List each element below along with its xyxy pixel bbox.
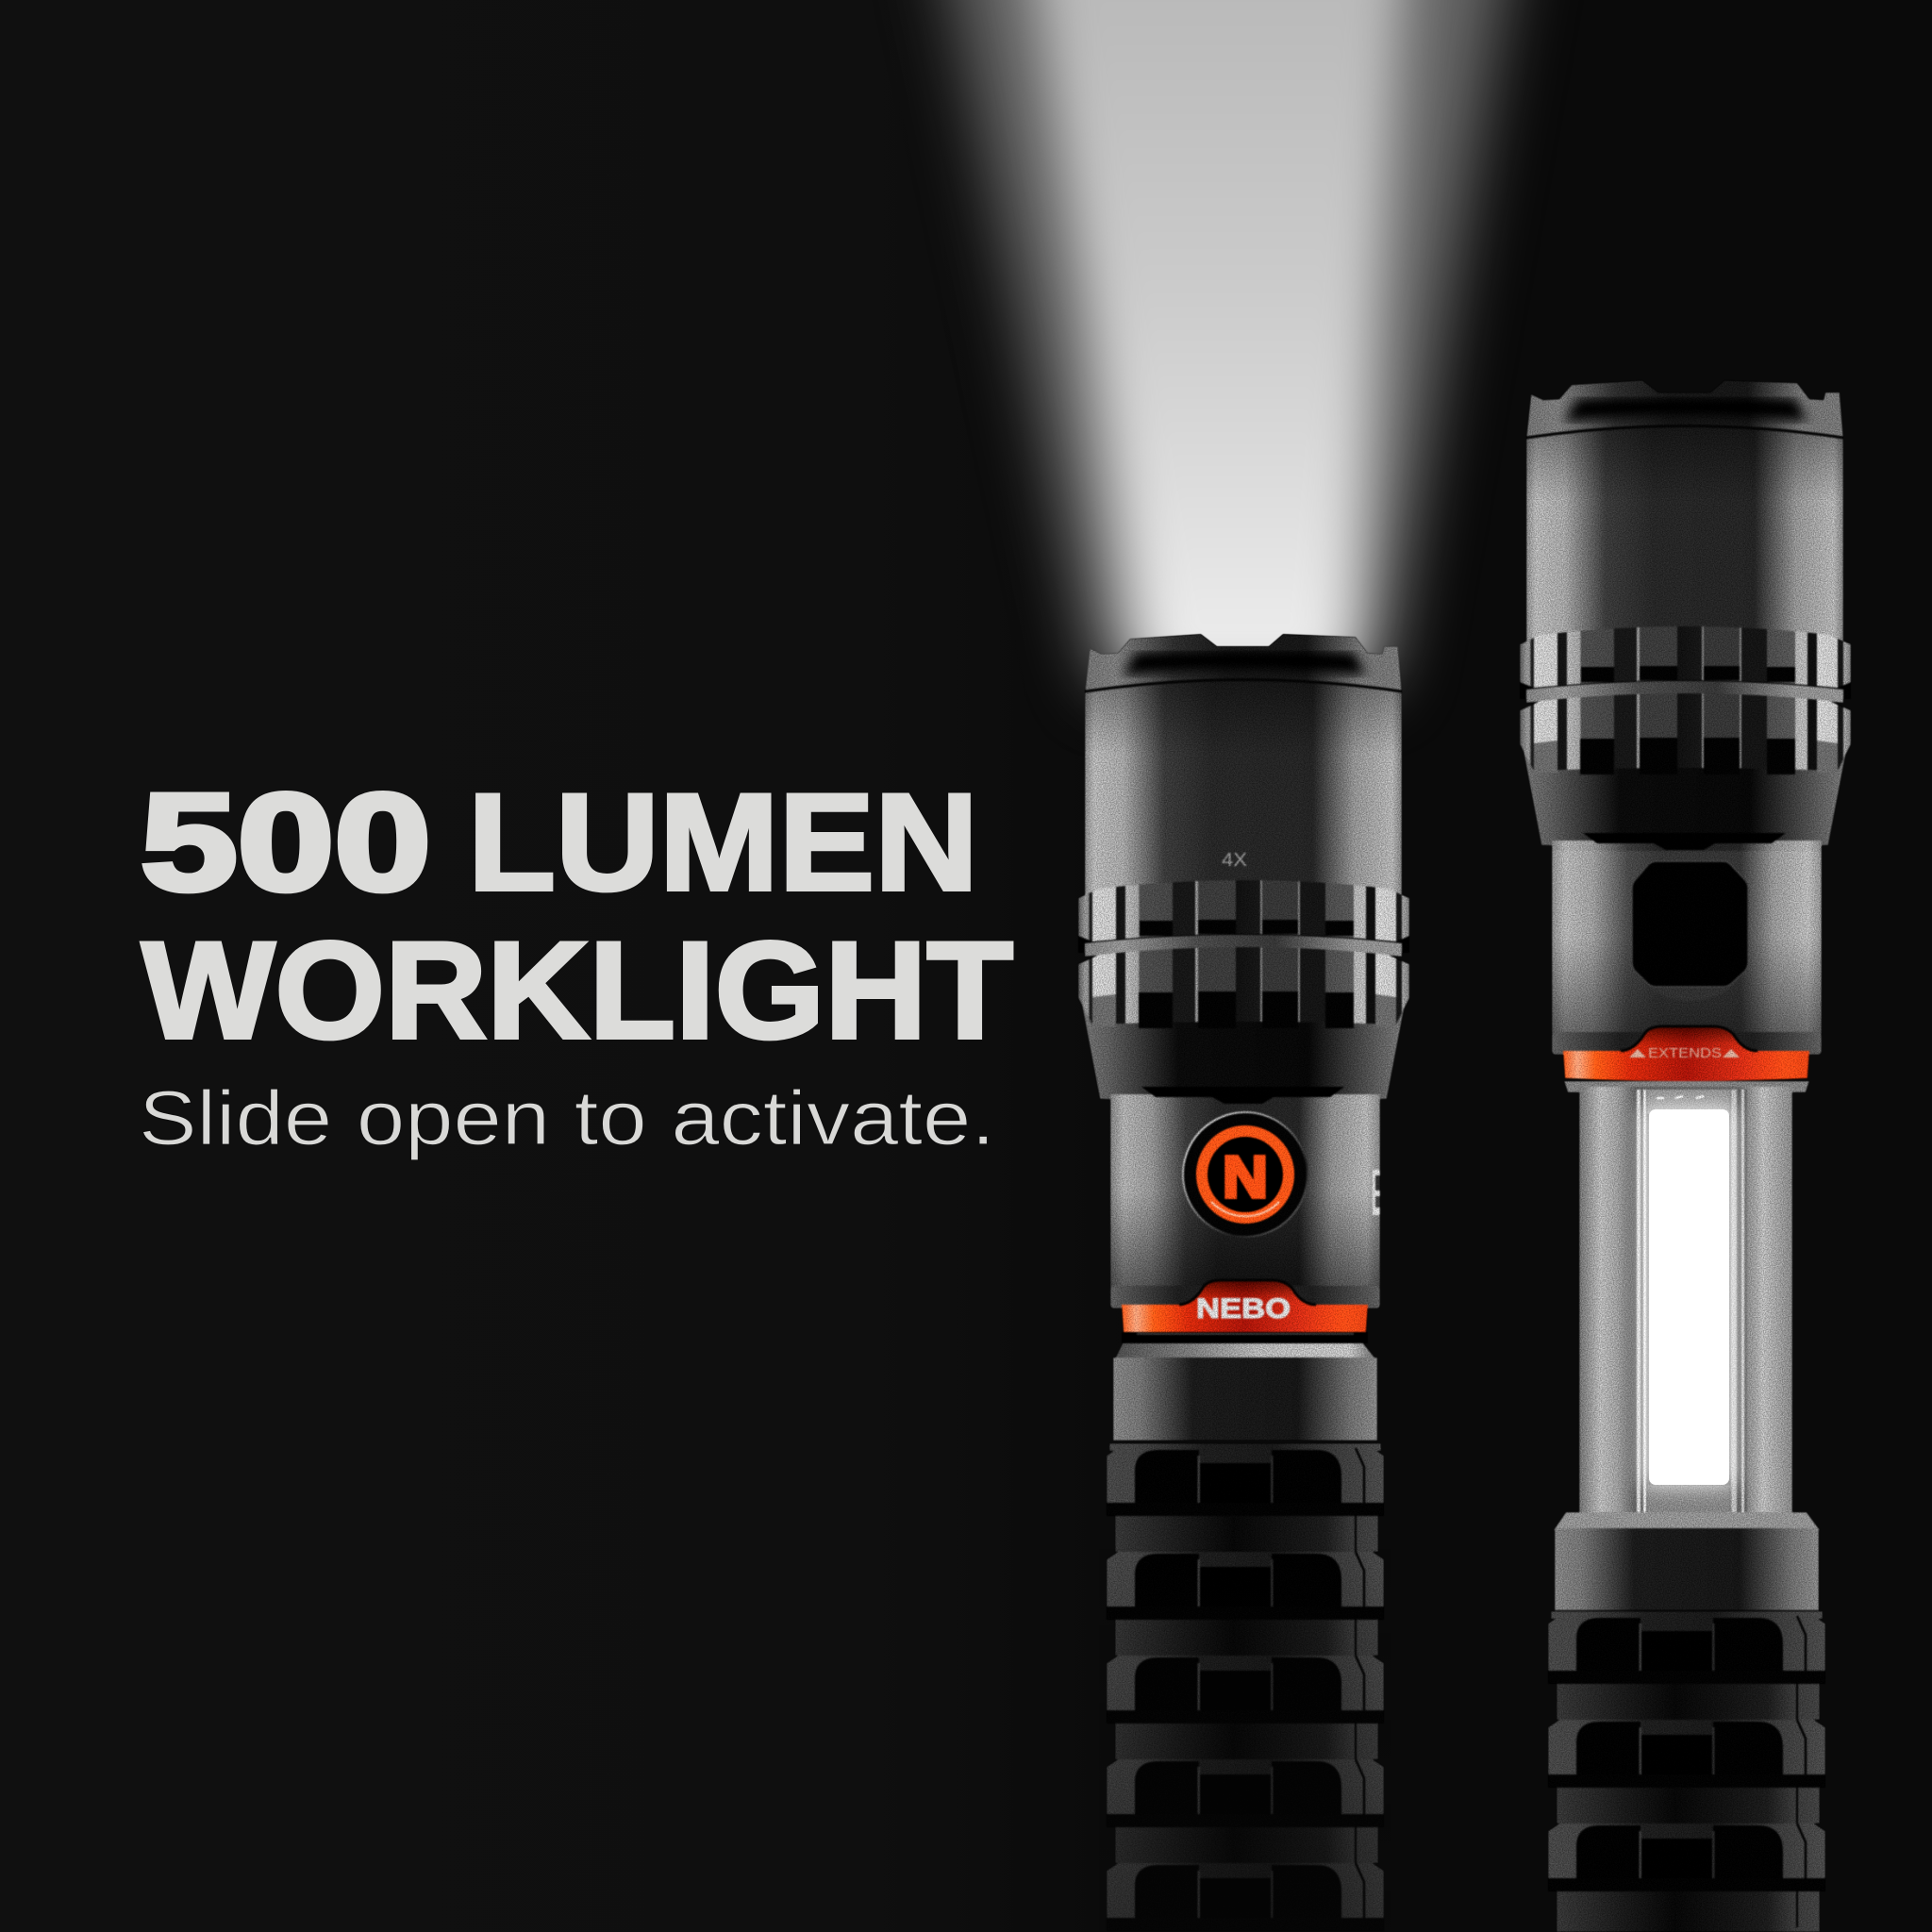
4X zoom marking: 4X — [1222, 850, 1247, 871]
left head — [1085, 634, 1402, 896]
light beam — [935, 0, 1519, 684]
orange band — [1110, 1280, 1380, 1335]
left grip — [1107, 1443, 1384, 1931]
telescoping tube — [1579, 1087, 1792, 1515]
base collar — [1554, 1512, 1820, 1610]
heading line 2: WORKLIGHT — [142, 913, 1013, 1067]
silver lip — [1564, 1081, 1809, 1092]
right neck — [1552, 833, 1822, 1034]
lower collar — [1113, 1332, 1377, 1441]
power button — [1183, 1112, 1307, 1237]
sensor window — [1632, 861, 1748, 1001]
subheading: Slide open to activate. — [139, 1075, 995, 1161]
right flashlight — [1520, 380, 1851, 1932]
right head — [1526, 380, 1843, 642]
grip shadow — [1099, 1547, 1391, 1932]
left neck — [1110, 1087, 1380, 1288]
COB panel — [1649, 1109, 1729, 1485]
heading word: lumen: LUMEN — [468, 765, 978, 919]
extends marking: EXTENDS — [1648, 1045, 1722, 1061]
side port label — [1373, 1170, 1380, 1215]
COB glow — [1641, 1106, 1736, 1487]
NEBO logo: NEBO — [1196, 1293, 1291, 1324]
flashlights — [1078, 380, 1851, 1932]
left flashlight — [1078, 634, 1409, 1931]
extends marking — [1629, 1045, 1740, 1061]
right orange band — [1552, 1026, 1822, 1081]
right grip — [1548, 1611, 1825, 1932]
N logo: N — [1223, 1145, 1268, 1210]
right focus ring — [1520, 626, 1851, 849]
worklight window — [1636, 1090, 1747, 1513]
left focus ring — [1078, 880, 1409, 1102]
heading — [141, 765, 1013, 1067]
heading number: 500 — [141, 765, 431, 919]
